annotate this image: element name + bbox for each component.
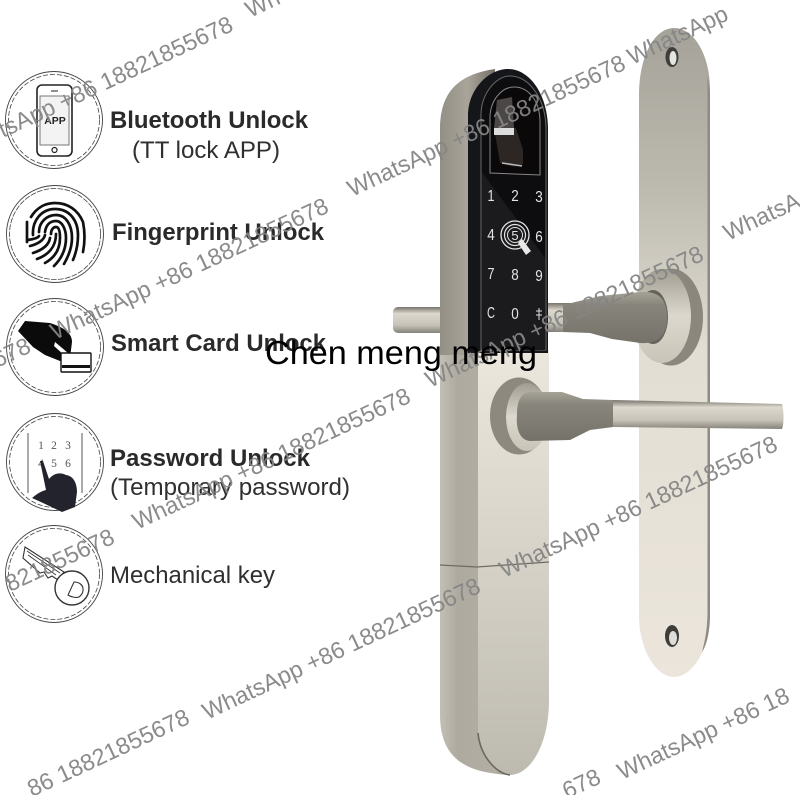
back plate bbox=[639, 28, 710, 677]
label: bluetooth unlock: Bluetooth Unlock bbox=[110, 108, 309, 134]
icon: keypad password: 1 bbox=[38, 440, 44, 452]
icon: phone app bbox=[6, 72, 102, 168]
icon: keypad password: 2 bbox=[51, 440, 57, 452]
screw hole: top bbox=[666, 47, 678, 67]
card reader rings: 5 bbox=[511, 228, 519, 243]
keypad digits: 7 bbox=[488, 266, 494, 283]
icon: mechanical key bbox=[6, 526, 102, 622]
keypad digits: 3 bbox=[535, 189, 543, 206]
icon: phone app: APP bbox=[44, 115, 66, 127]
label: fingerprint unlock: Fingerprint Unlock bbox=[112, 220, 325, 246]
watermarks: WhatsApp +86 18821855678 bbox=[198, 573, 484, 725]
keypad digits: 0 bbox=[511, 306, 519, 323]
watermarks: 86 18821855678 bbox=[23, 704, 193, 800]
icon: keypad password: 4 bbox=[38, 458, 44, 470]
seam bbox=[440, 562, 549, 567]
icon: keypad password: 6 bbox=[65, 458, 71, 470]
lower handle bbox=[490, 378, 784, 454]
keypad digits bbox=[487, 188, 543, 323]
upper handle: spindle and rosette bbox=[393, 268, 703, 366]
keypad digits: 1 bbox=[488, 188, 494, 205]
label: password unlock: Password Unlock bbox=[110, 446, 311, 472]
icon: keypad password bbox=[6, 414, 104, 512]
screw hole: bottom bbox=[665, 625, 679, 647]
card reader rings bbox=[501, 221, 531, 255]
label: mechanical key: Mechanical key bbox=[110, 563, 275, 589]
keypad digits: 8 bbox=[511, 267, 519, 284]
body side face bbox=[440, 69, 510, 775]
lock body bbox=[440, 69, 549, 775]
watermarks: WhatsApp +86 18821855678 bbox=[421, 241, 707, 393]
icon: fingerprint bbox=[6, 186, 104, 282]
keypad panel bbox=[468, 69, 548, 353]
watermarks: WhatsApp +86 18 bbox=[613, 682, 793, 785]
fingerprint reader bbox=[490, 87, 540, 175]
label: bluetooth unlock bbox=[110, 108, 309, 164]
label: password unlock: (Temporary password) bbox=[110, 475, 350, 501]
watermarks: tsApp +86 18821855678 bbox=[0, 11, 237, 143]
keypad digits: 6 bbox=[535, 229, 543, 246]
body front face bbox=[478, 350, 549, 775]
watermarks: WhatsApp +86 18821855678 bbox=[46, 193, 332, 345]
label: smart card unlock: Smart Card Unlock bbox=[111, 331, 327, 357]
watermarks: WhatsApp +86 18821855678 bbox=[343, 50, 629, 202]
label: password unlock bbox=[110, 446, 350, 501]
icon: keypad password: 3 bbox=[65, 440, 71, 452]
watermarks: WhatsApp bbox=[623, 0, 732, 70]
watermarks: WhatsApp +86 18821855678 bbox=[495, 431, 781, 583]
watermarks: WhatsApp +86 18821855678 bbox=[128, 383, 414, 535]
label: bluetooth unlock: (TT lock APP) bbox=[132, 138, 280, 164]
keypad digits: 2 bbox=[511, 188, 519, 205]
keypad digits: 4 bbox=[487, 227, 495, 244]
keypad digits: 9 bbox=[535, 268, 543, 285]
icon: smart card bbox=[6, 298, 104, 396]
icon: keypad password: 5 bbox=[51, 458, 57, 470]
overlaid name text: Chen meng meng bbox=[265, 334, 537, 371]
watermarks: 821855678 bbox=[1, 523, 118, 597]
keypad digits: C bbox=[487, 305, 495, 322]
